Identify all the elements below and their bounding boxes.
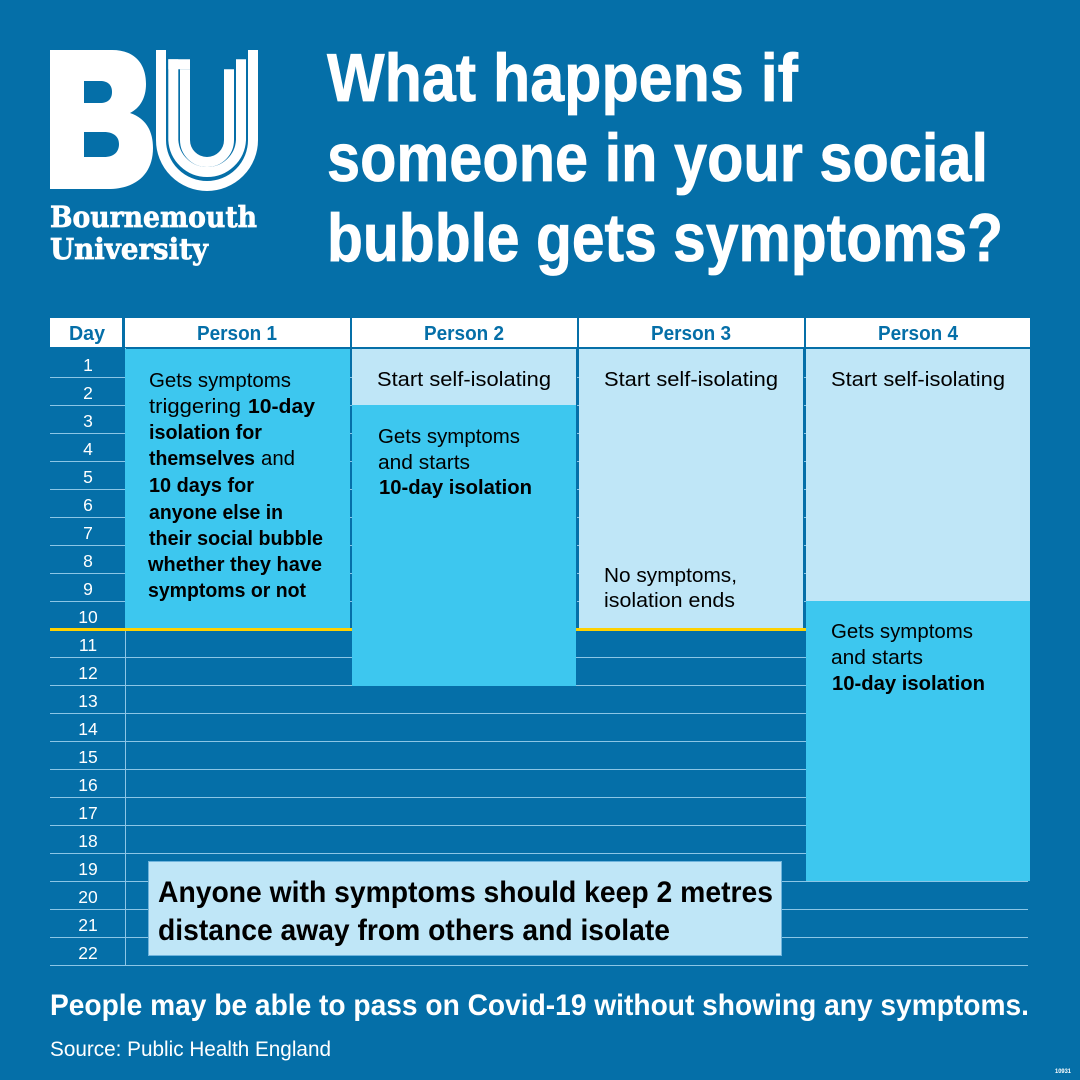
day numbers: 15 <box>78 747 98 767</box>
day numbers: 4 <box>83 439 93 459</box>
day numbers: 7 <box>83 523 93 543</box>
logo wordmark: Bournemouth <box>50 200 257 234</box>
callout <box>148 862 782 956</box>
logo mark: U <box>161 50 253 186</box>
panel: Person 3: isolation ends <box>604 589 735 612</box>
reference number: 10931 <box>1055 1069 1072 1075</box>
table header row <box>50 318 1030 347</box>
title <box>327 40 1003 276</box>
day numbers: 14 <box>78 719 98 739</box>
panel: Person 2 <box>352 349 576 686</box>
header: Person 3 <box>579 318 804 347</box>
header: Day <box>50 318 122 347</box>
title: What happens if <box>327 40 798 116</box>
panel: Person 1: whether they have <box>147 553 322 576</box>
logo: Bournemouth University <box>50 50 257 266</box>
Person 4 self-isolating block <box>806 349 1030 601</box>
day numbers: 16 <box>78 775 98 795</box>
logo wordmark: University <box>50 232 209 266</box>
title: someone in your social <box>327 120 988 196</box>
day numbers: 5 <box>83 467 93 487</box>
day numbers: 3 <box>83 411 93 431</box>
day numbers: 1 <box>83 355 93 375</box>
day numbers: 21 <box>78 915 98 935</box>
day numbers: 12 <box>78 663 98 683</box>
day numbers: 11 <box>79 635 97 655</box>
day numbers <box>78 355 98 963</box>
header: Person 2 <box>352 318 577 347</box>
header: Person 2: Person 2 <box>424 323 504 345</box>
Person 2 self-isolating block <box>352 349 576 405</box>
header: Day: Day <box>69 323 106 345</box>
panel: Person 3: Start self-isolating <box>604 368 778 391</box>
logo wordmark <box>50 200 257 266</box>
panel: Person 1: their social bubble <box>149 527 323 550</box>
Person 2 symptoms block <box>352 405 576 686</box>
panel: Person 1: and <box>261 447 295 470</box>
footer note: People may be able to pass on Covid-19 without showing any symptoms. <box>50 989 1029 1022</box>
callout: Anyone with symptoms should keep 2 metres <box>158 876 773 909</box>
day numbers: 2 <box>83 383 93 403</box>
source: Source: Public Health England <box>50 1038 331 1061</box>
day numbers: 8 <box>83 551 93 571</box>
day numbers: 22 <box>78 943 98 963</box>
callout: distance away from others and isolate <box>158 914 670 947</box>
panel: Person 1: 10-day <box>248 395 316 418</box>
Person 2 symptoms block: and starts <box>378 451 470 474</box>
table grid lines <box>50 348 1028 966</box>
day numbers: 17 <box>78 803 98 823</box>
panel: Person 1: themselves <box>149 447 255 470</box>
day numbers: 20 <box>78 887 98 907</box>
logo mark: B <box>50 50 153 189</box>
panel: Person 1: Gets symptoms <box>149 369 291 392</box>
Person 2 symptoms block: 10-day isolation <box>379 476 532 499</box>
panel: Person 1: symptoms or not <box>148 579 306 602</box>
panel: Person 1 <box>125 349 350 629</box>
day numbers: 9 <box>83 579 93 599</box>
Person 4 self-isolating block: Start self-isolating <box>831 368 1005 391</box>
day 10 marker line <box>50 628 806 631</box>
Person 4 symptoms block: Gets symptoms <box>831 620 973 643</box>
header: Person 4 <box>806 318 1030 347</box>
day numbers: 19 <box>78 859 98 879</box>
day numbers: 10 <box>78 607 98 627</box>
Person 2 self-isolating block: Start self-isolating <box>377 368 551 391</box>
day numbers: 18 <box>78 831 98 851</box>
panel: Person 1: 10 days for <box>149 474 254 497</box>
panel: Person 1: triggering <box>149 395 241 418</box>
Person 2 symptoms block: Gets symptoms <box>378 425 520 448</box>
header: Person 3: Person 3 <box>651 323 731 345</box>
Person 4 symptoms block <box>806 601 1030 881</box>
Person 4 symptoms block: 10-day isolation <box>832 672 985 695</box>
panel: Person 1: isolation for <box>149 421 262 444</box>
day numbers: 6 <box>83 495 93 515</box>
panel: Person 3: No symptoms, <box>604 564 737 587</box>
panel: Person 3 <box>579 349 803 629</box>
header: Person 4: Person 4 <box>878 323 959 345</box>
panel: Person 4 <box>806 349 1030 881</box>
Person 4 symptoms block: and starts <box>831 646 923 669</box>
day numbers: 13 <box>78 691 98 711</box>
panel: Person 1: anyone else in <box>149 501 283 524</box>
header: Person 1 <box>125 318 350 347</box>
header: Person 1: Person 1 <box>197 323 277 345</box>
